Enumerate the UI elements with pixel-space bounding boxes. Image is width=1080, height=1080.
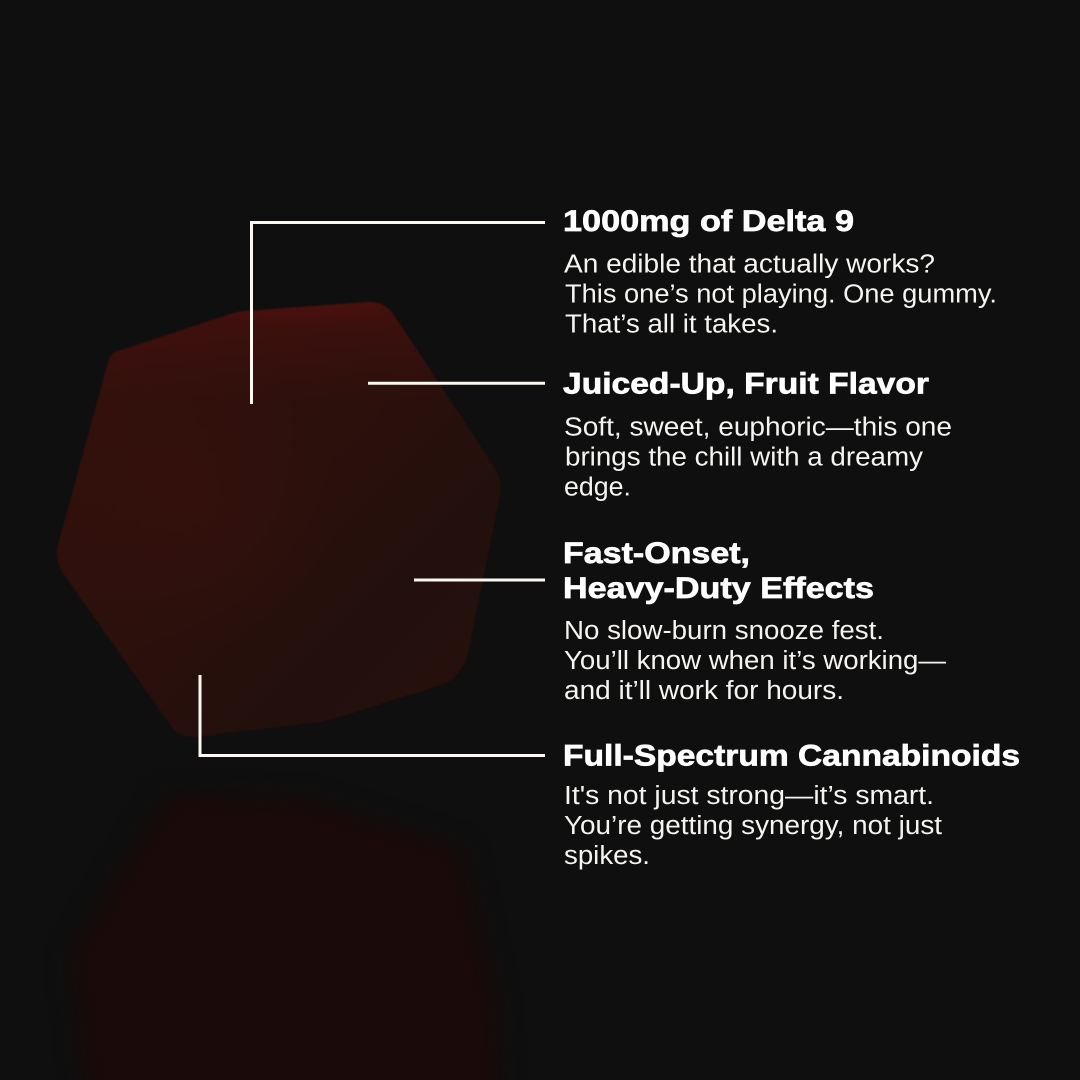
callout line: Cannabinoids <box>200 675 545 756</box>
body: brings the chill with a dreamy <box>565 444 923 472</box>
body <box>564 250 997 338</box>
body <box>564 782 942 870</box>
callout line: Fruit Flavor <box>368 382 545 385</box>
body: spikes. <box>564 842 650 870</box>
text block: Full-Spectrum Cannabinoids <box>563 740 1020 870</box>
red hexagonal gummy <box>57 302 501 737</box>
body <box>564 414 952 502</box>
callout line: Effects <box>414 578 545 582</box>
body: Soft, sweet, euphoric—this one <box>564 414 952 442</box>
heading: Heavy-Duty Effects <box>563 572 874 605</box>
heading <box>563 537 874 605</box>
heading: Juiced-Up, Fruit Flavor <box>563 368 929 400</box>
body: and it’ll work for hours. <box>564 677 844 705</box>
body: This one’s not playing. One gummy. <box>565 280 997 308</box>
callout line: Delta 9 <box>252 222 545 404</box>
gummy reflection <box>70 795 500 1080</box>
text block: Juiced-Up, Fruit Flavor <box>563 368 952 502</box>
text block: 1000mg of Delta 9 <box>563 205 997 338</box>
heading: Fast-Onset, <box>563 537 750 570</box>
body: No slow-burn snooze fest. <box>564 617 884 645</box>
body: That’s all it takes. <box>565 310 778 338</box>
body: edge. <box>564 474 631 502</box>
body: An edible that actually works? <box>564 250 935 278</box>
body: You’re getting synergy, not just <box>564 812 942 840</box>
body: It's not just strong—it’s smart. <box>564 782 934 810</box>
body: You’ll know when it’s working— <box>564 647 947 675</box>
body <box>564 617 947 705</box>
heading: 1000mg of Delta 9 <box>563 205 854 238</box>
heading: Full-Spectrum Cannabinoids <box>563 740 1020 772</box>
text block: Fast-Onset, Heavy-Duty Effects <box>563 537 947 705</box>
